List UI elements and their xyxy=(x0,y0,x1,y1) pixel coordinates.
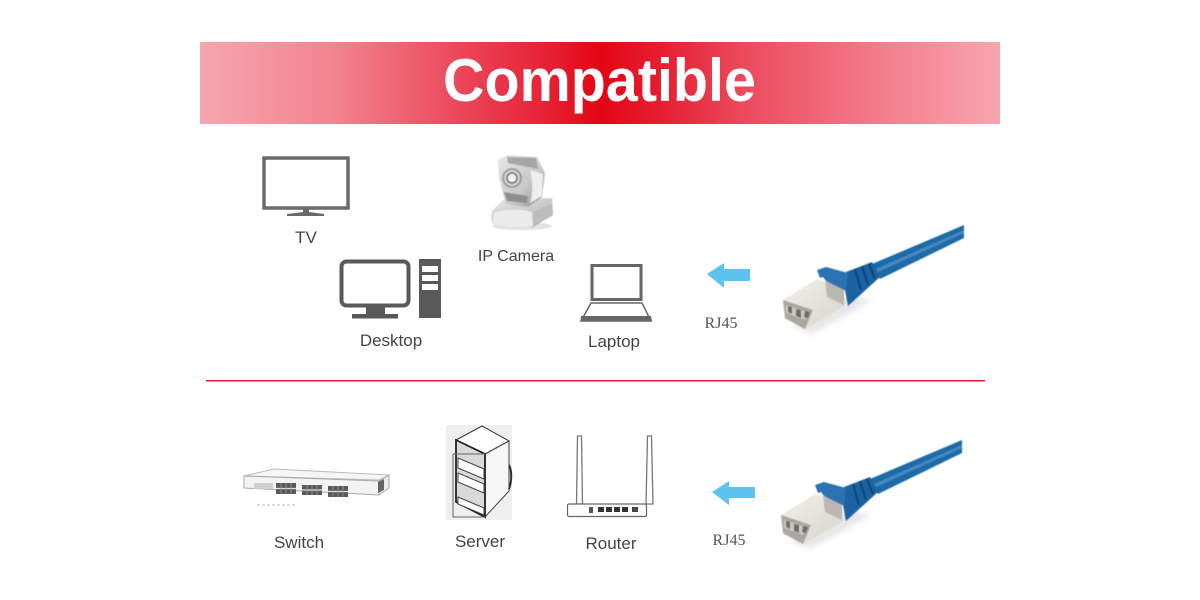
divider line xyxy=(206,380,985,382)
label: Server: Server xyxy=(455,532,505,551)
label: IP Camera: IP Camera xyxy=(478,248,554,265)
icon: network switch xyxy=(244,469,389,505)
cable: top xyxy=(783,225,964,334)
icon: server rack xyxy=(446,425,512,520)
icon: TV xyxy=(264,158,348,216)
icon: IP camera xyxy=(491,155,553,230)
label: bottom RJ45: RJ45 xyxy=(713,532,745,549)
label: Router: Router xyxy=(585,534,637,553)
icon: laptop xyxy=(580,266,652,322)
title: Compatible xyxy=(443,47,756,114)
header banner xyxy=(200,42,1000,124)
arrow: top RJ45 xyxy=(707,263,750,288)
label: top RJ45: RJ45 xyxy=(705,315,737,332)
label: Desktop: Desktop xyxy=(360,331,422,350)
label: TV: TV xyxy=(295,228,318,247)
icon: desktop computer xyxy=(342,259,441,318)
arrow: bottom RJ45 xyxy=(712,481,755,505)
label: Switch: Switch xyxy=(274,533,324,552)
label: Laptop: Laptop xyxy=(588,332,640,351)
cable: bottom xyxy=(781,440,962,549)
icon: router xyxy=(568,436,653,516)
